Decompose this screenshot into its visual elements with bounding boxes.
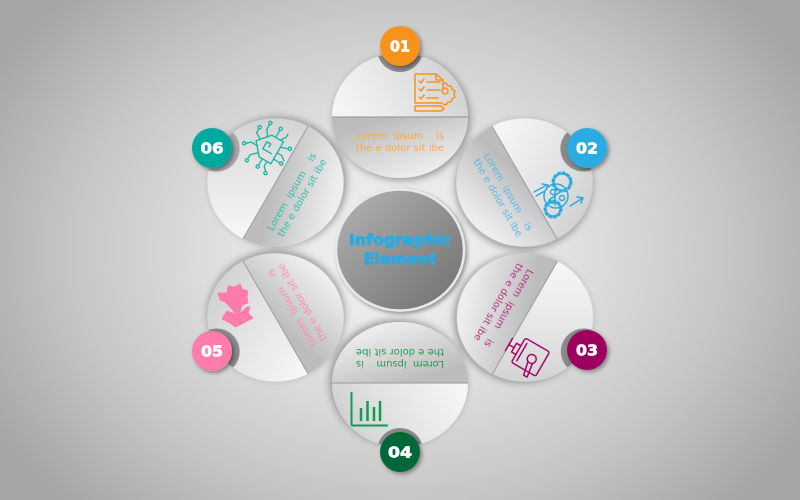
card 02: the e dolor sit ibe [470, 157, 524, 239]
icon: circuit house [234, 115, 298, 180]
card 02 [451, 116, 596, 254]
panel: step 01 [332, 26, 468, 178]
badge 01: 01 [390, 38, 410, 56]
badge 04 [380, 432, 420, 472]
card 06 [206, 113, 351, 250]
icon: bar chart [352, 392, 388, 426]
panel: step 02 [451, 116, 612, 254]
panel: step 04 [332, 322, 468, 474]
icon: puzzle pieces [218, 284, 253, 327]
title: Infographic [349, 231, 451, 249]
center circle [336, 190, 464, 310]
panel: step 03 [450, 250, 612, 387]
panel: step 05 [192, 246, 349, 384]
card 05 [204, 246, 349, 384]
badge 06: 06 [200, 140, 224, 158]
badge 03: 03 [576, 342, 598, 360]
card 06: Lorem ipsum is [266, 151, 319, 233]
card 03 [450, 250, 595, 387]
badge 02 [567, 128, 607, 168]
title [349, 231, 451, 268]
badge 01 [380, 26, 420, 66]
card 03: Lorem ipsum is [481, 267, 535, 349]
badge 06 [192, 128, 232, 168]
card 05: Lorem ipsum is [266, 267, 319, 349]
card 01: the e dolor sit ibe [356, 143, 444, 154]
icon: gears and arrows [534, 172, 583, 218]
title: Element [364, 250, 436, 268]
badge 03 [567, 330, 607, 370]
card 01 [332, 26, 468, 178]
panel: step 06 [192, 113, 351, 250]
card 04: the e dolor sit ibe [356, 346, 444, 357]
card 01: Lorem ipsum is [356, 131, 444, 142]
card 02: Lorem ipsum is [481, 151, 534, 233]
badge 05: 05 [201, 342, 223, 360]
badge 05 [192, 331, 232, 371]
card 06: the e dolor sit ibe [276, 157, 330, 239]
icon: tablet with stand [499, 333, 550, 381]
card 04 [332, 322, 468, 474]
icon: checklist with gear [415, 74, 455, 111]
badge 04: 04 [388, 444, 412, 462]
badge 02: 02 [576, 140, 598, 158]
card 05: the e dolor sit ibe [276, 261, 330, 343]
card 04: Lorem ipsum is [356, 358, 444, 369]
card 03: the e dolor sit ibe [471, 261, 524, 343]
